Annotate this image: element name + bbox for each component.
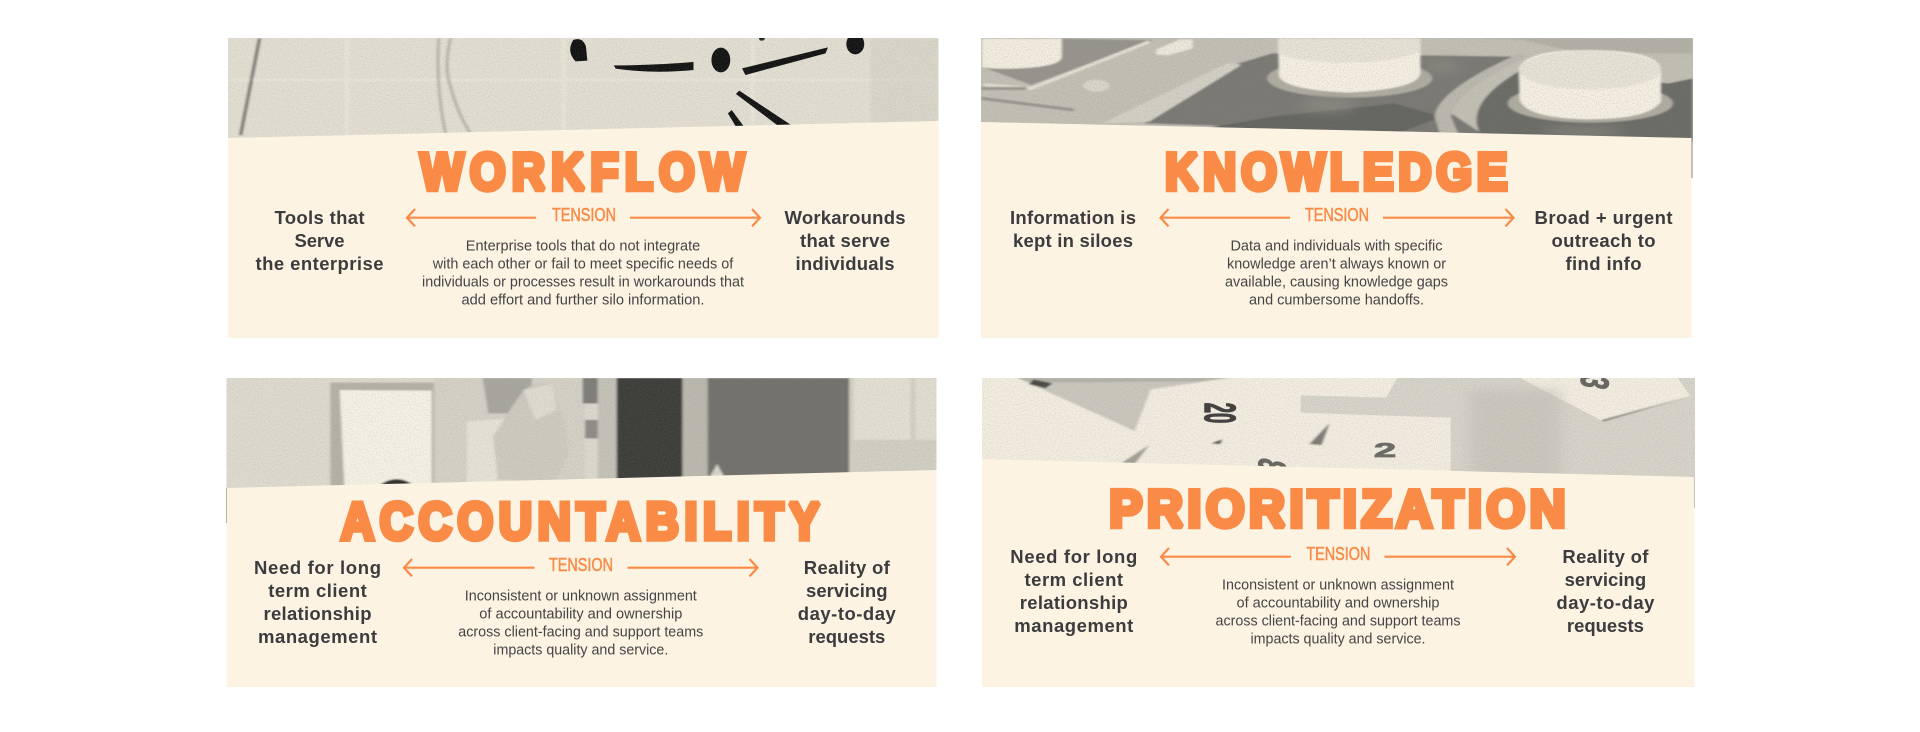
panel: accountability	[226, 378, 936, 687]
tension arrow	[407, 205, 760, 226]
right label: servicing	[1565, 569, 1646, 590]
left label	[1010, 546, 1137, 636]
description: and cumbersome handoffs.	[1249, 292, 1424, 309]
cream card	[982, 459, 1694, 687]
left label: relationship	[1020, 592, 1128, 613]
description: Inconsistent or unknown assignment	[465, 588, 698, 605]
photo: whiteboard with marker strokes	[228, 34, 939, 143]
left label: term client	[1024, 569, 1123, 590]
panel: workflow	[228, 34, 939, 338]
description: impacts quality and service.	[1250, 631, 1426, 648]
left label	[1010, 207, 1136, 251]
cream card	[228, 121, 938, 338]
left label: management	[258, 626, 377, 647]
right label: that serve	[800, 230, 890, 251]
right label	[798, 557, 897, 647]
right label	[1534, 207, 1672, 274]
left label: Information is	[1010, 207, 1136, 228]
photo numerals: 3	[1249, 454, 1295, 478]
right label: requests	[1567, 615, 1644, 636]
description: knowledge aren’t always known or	[1227, 256, 1446, 273]
right label: day-to-day	[1556, 592, 1655, 613]
description	[458, 588, 703, 659]
description: across client-facing and support teams	[458, 624, 703, 641]
photo numerals: 20	[1195, 403, 1244, 423]
panel: knowledge	[981, 38, 1693, 338]
description: impacts quality and service.	[493, 642, 668, 659]
photo numerals	[1204, 378, 1610, 467]
right label: servicing	[806, 580, 888, 601]
tension arrow: TENSION	[1306, 544, 1370, 564]
tension arrow: TENSION	[1305, 205, 1369, 225]
tension arrow	[1160, 205, 1514, 226]
left label: Need for long	[254, 557, 381, 578]
cream card	[226, 470, 936, 687]
description	[422, 238, 745, 309]
panel: prioritization	[982, 372, 1696, 687]
right label: Reality of	[804, 557, 891, 578]
right label: outreach to	[1552, 230, 1656, 251]
right label: find info	[1566, 253, 1642, 274]
right label	[1556, 546, 1655, 636]
description: Inconsistent or unknown assignment	[1222, 577, 1455, 594]
right label: Broad + urgent	[1534, 207, 1672, 228]
description: across client-facing and support teams	[1216, 613, 1460, 630]
right label: requests	[808, 626, 885, 647]
photo: storage tanks	[981, 38, 1693, 143]
description: of accountability and ownership	[1236, 595, 1440, 612]
tension arrow: TENSION	[549, 555, 613, 575]
photo: hand at whiteboard	[226, 378, 936, 493]
left label: term client	[268, 580, 367, 601]
left label: the enterprise	[256, 253, 384, 274]
tension arrow	[404, 555, 758, 576]
right label: Workarounds	[784, 207, 906, 228]
right label: Reality of	[1562, 546, 1649, 567]
heading: KNOWLEDGE	[1165, 144, 1507, 201]
left label: Serve	[294, 230, 344, 251]
right label: day-to-day	[798, 603, 897, 624]
cream card	[981, 122, 1692, 338]
heading: ACCOUNTABILITY	[341, 493, 820, 551]
description: Enterprise tools that do not integrate	[466, 238, 700, 255]
photo numerals: 2	[1374, 439, 1396, 461]
left label	[254, 557, 381, 647]
right label	[784, 207, 906, 274]
left label: Need for long	[1010, 546, 1137, 567]
tension arrow	[1161, 544, 1515, 565]
tension arrow: TENSION	[552, 205, 616, 225]
heading: WORKFLOW	[420, 144, 745, 201]
left label: Tools that	[274, 207, 364, 228]
left label: relationship	[264, 603, 372, 624]
description: individuals or processes result in workarounds that	[422, 274, 745, 291]
description: of accountability and ownership	[479, 606, 682, 623]
left label: management	[1014, 615, 1133, 636]
heading: PRIORITIZATION	[1109, 479, 1565, 538]
description	[1225, 238, 1448, 309]
description: available, causing knowledge gaps	[1225, 274, 1448, 291]
photo: scattered numbered cards	[982, 378, 1695, 477]
description: add effort and further silo information.	[462, 292, 704, 309]
description: with each other or fail to meet specific needs of	[432, 256, 734, 273]
description: Data and individuals with specific	[1230, 238, 1443, 255]
description	[1216, 577, 1460, 648]
photo numerals: 3	[1572, 372, 1618, 392]
left label	[256, 207, 384, 274]
right label: individuals	[796, 253, 894, 274]
left label: kept in siloes	[1013, 230, 1133, 251]
